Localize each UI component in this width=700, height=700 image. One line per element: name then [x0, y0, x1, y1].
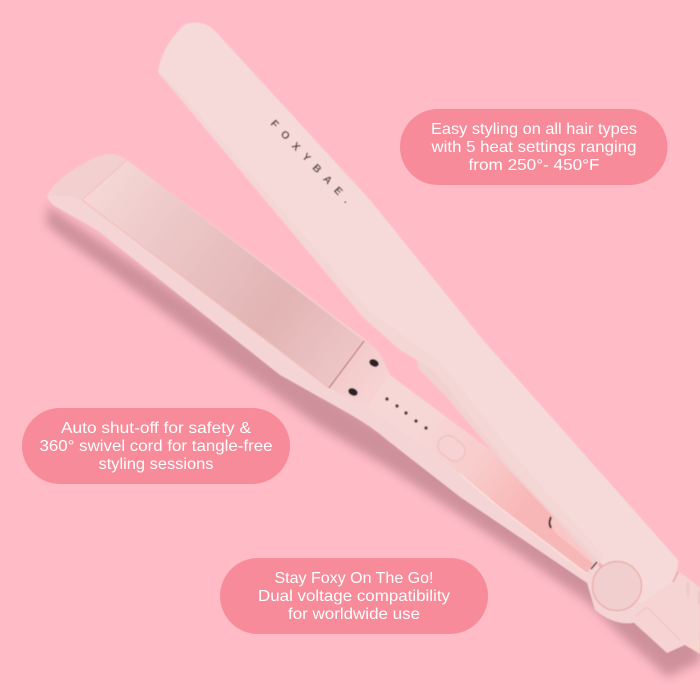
callout: dual voltage: [220, 558, 488, 634]
relief seam: [636, 607, 680, 640]
upper arm under sliver: [417, 360, 600, 566]
brand logo: FOXYBAE.: [268, 118, 352, 206]
tip lip: [47, 154, 127, 200]
head holes: [368, 358, 380, 368]
upper arm: [158, 23, 678, 604]
relief grooves: [688, 582, 699, 604]
callout: heat settings: with 5 heat settings ranging: [430, 139, 636, 156]
hinge slot: [551, 517, 598, 566]
callout: auto shut-off: 360° swivel cord for tangle-free: [40, 438, 273, 455]
power button: [434, 432, 469, 465]
plate edge line: [82, 160, 329, 388]
callout: heat settings: Easy styling on all hair types: [431, 121, 637, 138]
head block: [329, 339, 390, 407]
control strip: [367, 375, 594, 573]
cord: [683, 636, 700, 654]
lower arm body: [47, 154, 640, 623]
end gap accent: [673, 572, 678, 582]
strip ridge highlight: [460, 474, 587, 574]
callout: dual voltage: for worldwide use: [288, 606, 420, 623]
callout: heat settings: [400, 109, 668, 185]
hinge disc: [592, 562, 642, 610]
strain relief: [633, 572, 700, 653]
indicator dots: [385, 397, 428, 430]
plate seam: [329, 341, 364, 388]
callout: dual voltage: Dual voltage compatibility: [258, 588, 450, 605]
drop shadow under straightener: [47, 205, 700, 677]
callout: dual voltage: Stay Foxy On The Go!: [274, 570, 434, 587]
heating plate: [82, 160, 363, 388]
callout: heat settings: from 250°- 450°F: [468, 157, 600, 174]
upper arm side shade: [158, 72, 604, 562]
callout: auto shut-off: Auto shut-off for safety &: [61, 420, 251, 437]
callout: auto shut-off: styling sessions: [98, 456, 214, 473]
hinge gap highlight: [591, 562, 597, 569]
callout: auto shut-off: [22, 408, 290, 484]
